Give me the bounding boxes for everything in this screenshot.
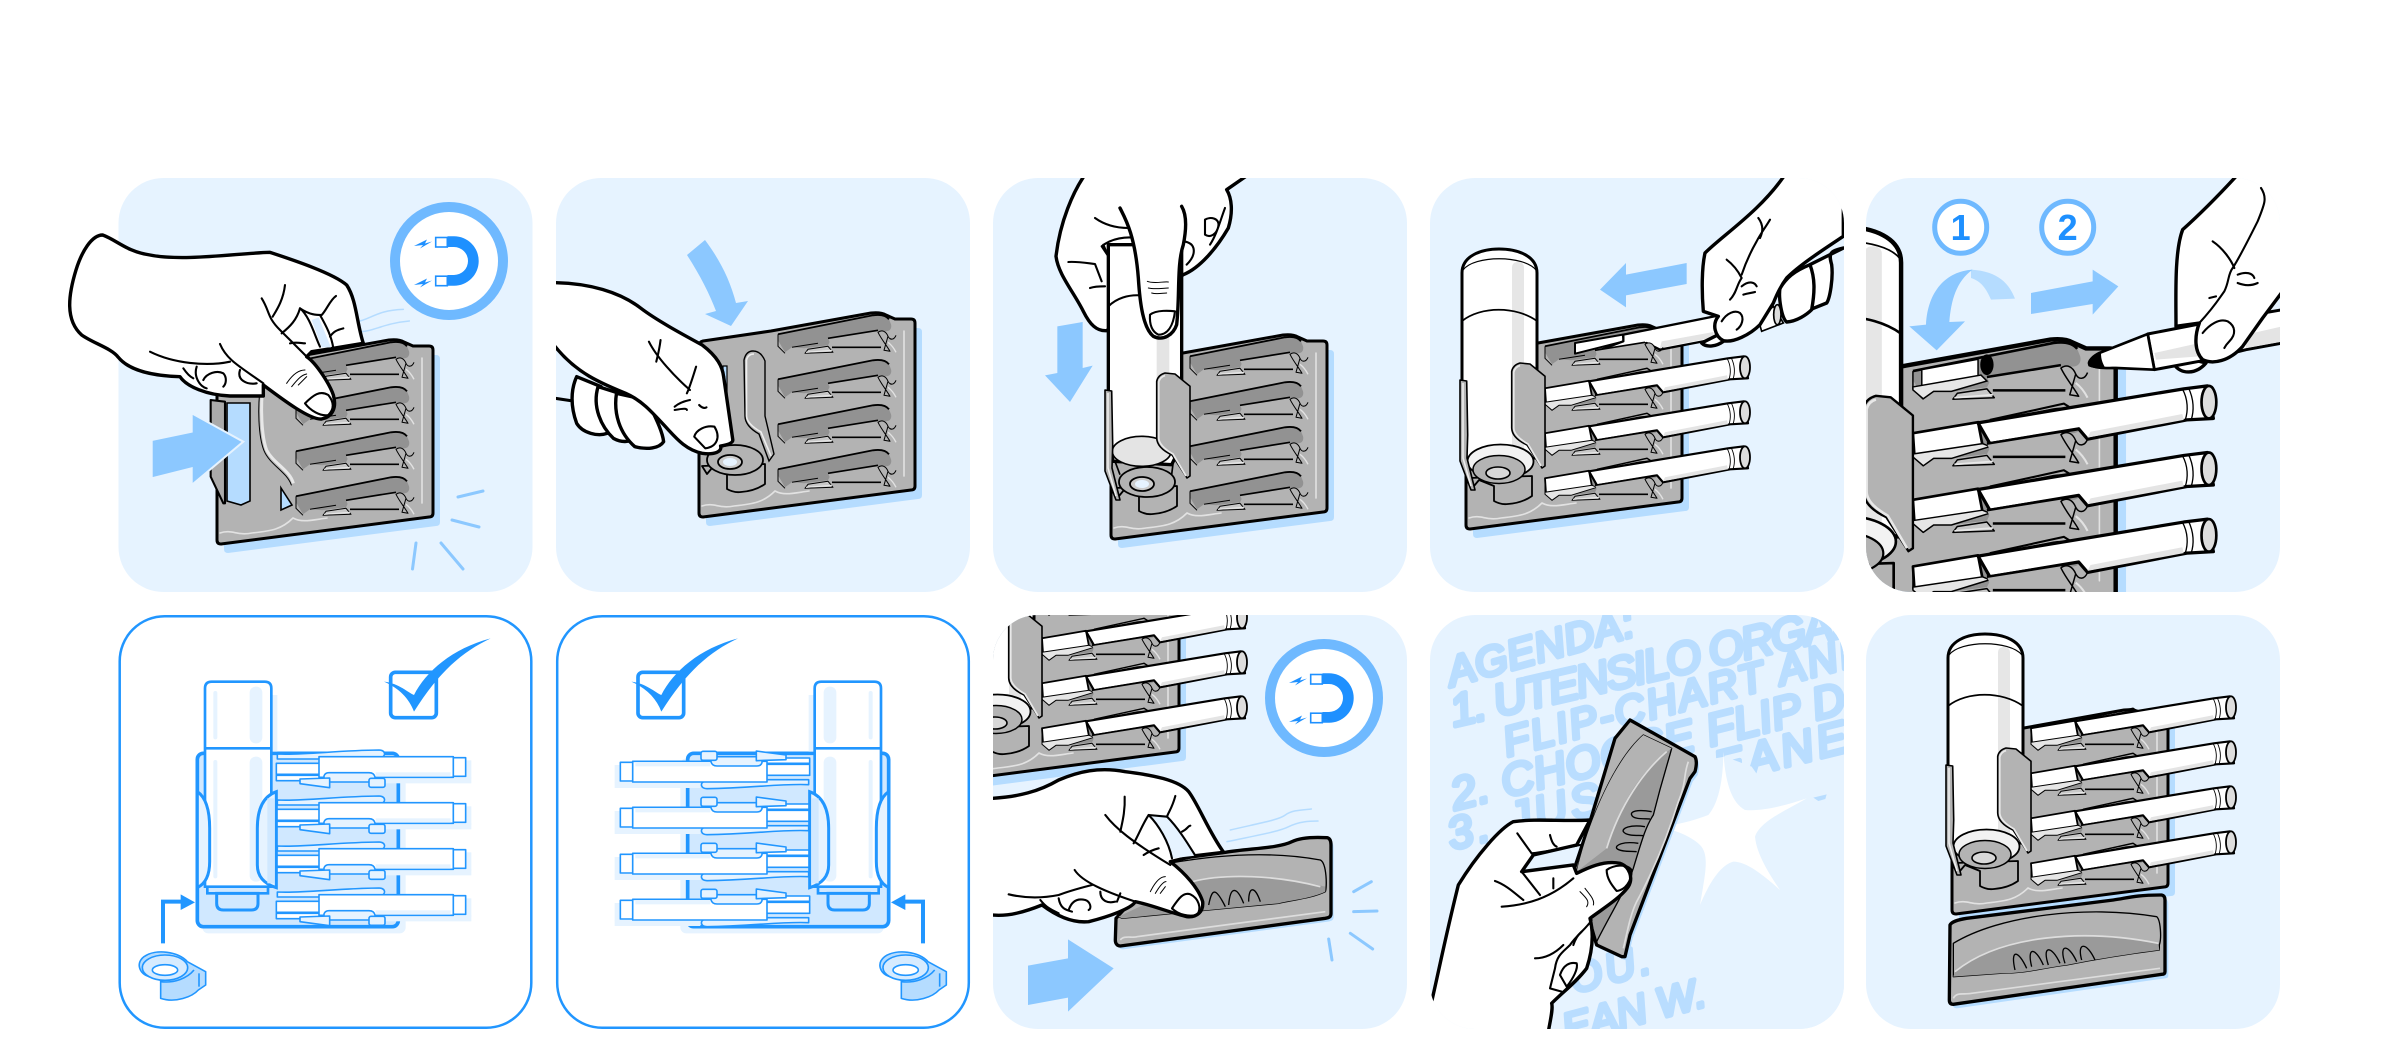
panel: step 3 drop tube into holder bbox=[993, 175, 1407, 592]
rubbed-out area bbox=[1689, 756, 1756, 792]
arrow: left bbox=[1600, 263, 1687, 307]
check mark bbox=[384, 638, 491, 718]
step badge 2: 2 bbox=[2058, 207, 2078, 248]
eraser bbox=[1573, 720, 1699, 960]
panel: step 9 wipe whiteboard bbox=[1430, 615, 1844, 1029]
waves bbox=[1227, 809, 1318, 842]
arrow: down bbox=[1045, 322, 1093, 402]
remaining handwriting: YOU. bbox=[1533, 936, 1655, 1010]
cup mount bbox=[1114, 467, 1177, 514]
mirrored tray with tube and pen shadows bbox=[615, 682, 923, 943]
handwritten agenda text: FLIP-CHART AND bbox=[1498, 625, 1874, 765]
eraser bbox=[1949, 895, 2168, 1008]
cup part bbox=[139, 952, 206, 1000]
pens bbox=[276, 750, 466, 926]
curved arrow bbox=[1909, 270, 2015, 350]
tray with pens bbox=[1866, 226, 2218, 592]
hand bbox=[989, 770, 1224, 922]
vibration waves bbox=[320, 309, 409, 342]
remaining handwriting bbox=[1533, 794, 1827, 1041]
panel: step 2 insert holder bbox=[540, 178, 970, 592]
panel: step 1 attach plate to wall bbox=[70, 178, 532, 592]
panel: correct mount on left side bbox=[120, 616, 531, 1028]
sparkle wipe bbox=[1674, 752, 1806, 904]
tube bbox=[1460, 249, 1545, 490]
check mark bbox=[631, 638, 738, 718]
step badge 2 bbox=[2042, 201, 2094, 253]
hand bbox=[1427, 820, 1632, 1032]
tray bbox=[1111, 335, 1334, 548]
tray bbox=[217, 340, 440, 553]
arrow: right bbox=[1028, 939, 1114, 1012]
hand bbox=[1702, 175, 1843, 346]
arrow: push towards wall bbox=[152, 413, 243, 485]
tray bbox=[699, 313, 922, 526]
clip tabs bbox=[1105, 373, 1190, 500]
impact lines bbox=[412, 491, 483, 569]
step badge 1: 1 bbox=[1951, 207, 1971, 248]
icon: magnet bbox=[395, 207, 503, 315]
eraser bbox=[1115, 837, 1334, 949]
tray with pens bbox=[993, 615, 1248, 786]
panel: correct mount on right side bbox=[557, 616, 969, 1028]
tray with pens bbox=[1466, 325, 1689, 538]
arrow: curved down bbox=[687, 240, 748, 326]
panel: step 8 attach eraser bbox=[993, 615, 1407, 1029]
pens, rotated bbox=[620, 751, 810, 927]
clip tab bbox=[810, 792, 829, 888]
hand bbox=[70, 235, 363, 419]
step badge 1 bbox=[1935, 201, 1987, 253]
panel: step 5 flip pen and draw bbox=[1866, 178, 2280, 592]
tube bbox=[1102, 237, 1182, 475]
hand: index finger bbox=[1120, 198, 1186, 338]
panel: step 4 insert marker pens bbox=[1430, 175, 1844, 592]
handwritten agenda text: 2. CHOOSE FLIP DRY bbox=[1444, 657, 1913, 820]
handwritten agenda text: 1. UTENSILO ORGANI bbox=[1445, 589, 1878, 736]
clip on the plate bbox=[211, 383, 293, 503]
cup part bbox=[880, 952, 946, 1000]
handwritten agenda text: AGENDA: bbox=[1439, 599, 1639, 696]
handwritten agenda text: 3. JUST CLEANER bbox=[1442, 702, 1887, 860]
handwritten agenda text bbox=[1448, 615, 1844, 850]
pen in motion bbox=[1575, 315, 1721, 354]
tray with pens and tube bbox=[1946, 634, 2236, 923]
impact lines bbox=[1329, 882, 1377, 960]
right clip tab bbox=[257, 792, 276, 888]
marker and hand bbox=[2088, 175, 2283, 372]
straight arrow bbox=[2031, 270, 2118, 315]
panel: step 10 finished organizer bbox=[1866, 615, 2280, 1029]
icon: magnet bbox=[1270, 644, 1378, 752]
hand bbox=[540, 283, 733, 454]
hand: back bbox=[1056, 175, 1248, 331]
tray with tube and pen shadows bbox=[163, 682, 471, 943]
